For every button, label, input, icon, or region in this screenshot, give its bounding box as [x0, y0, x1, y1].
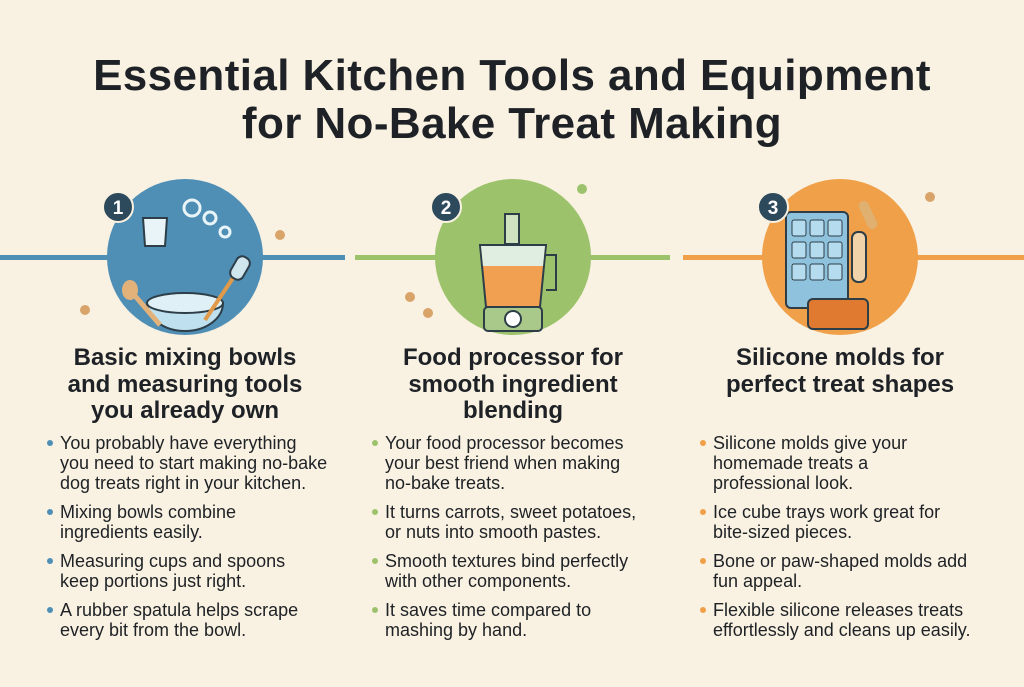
bullets 3: fun appeal.: [713, 571, 802, 591]
bullets 3: Flexible silicone releases treats: [713, 600, 963, 620]
bullets 1: Measuring cups and spoons: [60, 551, 285, 571]
bullets 1: Mixing bowls combine: [60, 502, 236, 522]
bullets 2: mashing by hand.: [385, 620, 527, 640]
bullets 2: It turns carrots, sweet potatoes,: [385, 502, 636, 522]
bullets 1: [47, 433, 327, 640]
icon: mixing tools circle: [107, 179, 263, 335]
bullets 2: Your food processor becomes: [385, 433, 623, 453]
bullets 2: or nuts into smooth pastes.: [385, 522, 601, 542]
heading 2: [403, 344, 623, 424]
heading 2: blending: [463, 397, 563, 424]
bullets 2: your best friend when making: [385, 453, 620, 473]
title: for No-Bake Treat Making: [242, 99, 782, 148]
bullets 3: homemade treats a: [713, 453, 868, 473]
bullets 3: [700, 433, 970, 640]
heading 3: perfect treat shapes: [726, 370, 954, 398]
bullets 1: every bit from the bowl.: [60, 620, 246, 640]
bullets 2: with other components.: [385, 571, 571, 591]
title: Essential Kitchen Tools and Equipment: [93, 51, 931, 100]
bullets 3: professional look.: [713, 473, 853, 493]
bullets 3: Silicone molds give your: [713, 433, 907, 453]
title: [93, 51, 931, 148]
badges: 3: [768, 198, 778, 219]
icon: food processor circle: [435, 179, 591, 335]
bullets 1: keep portions just right.: [60, 571, 246, 591]
heading 1: and measuring tools: [68, 370, 302, 398]
heading 3: [726, 344, 954, 398]
bullets 2: It saves time compared to: [385, 600, 591, 620]
bullets 1: you need to start making no-bake: [60, 453, 327, 473]
timeline line blue: [0, 255, 345, 260]
bullets 3: Ice cube trays work great for: [713, 502, 940, 522]
heading 3: Silicone molds for: [736, 344, 944, 371]
heading 2: Food processor for: [403, 344, 623, 371]
badges: 2: [441, 198, 451, 219]
badges: 1: [113, 198, 124, 219]
bullets 3: effortlessly and cleans up easily.: [713, 620, 970, 640]
heading 1: [68, 344, 302, 424]
timeline line green: [355, 255, 670, 260]
bullets 1: You probably have everything: [60, 433, 297, 453]
heading 1: you already own: [91, 397, 279, 424]
icon: silicone molds circle: [762, 179, 918, 335]
heading 1: Basic mixing bowls: [74, 344, 296, 371]
bullets 1: A rubber spatula helps scrape: [60, 600, 298, 620]
bullets 1: ingredients easily.: [60, 522, 203, 542]
bullets 3: bite-sized pieces.: [713, 522, 852, 542]
heading 2: smooth ingredient: [408, 370, 618, 398]
timeline line orange: [683, 255, 1024, 260]
badges: [103, 192, 788, 222]
decorative paws: [80, 184, 935, 318]
bullets 1: dog treats right in your kitchen.: [60, 473, 306, 493]
bullets 2: no-bake treats.: [385, 473, 505, 493]
bullets 2: [372, 433, 636, 640]
bullets 3: Bone or paw-shaped molds add: [713, 551, 967, 571]
bullets 2: Smooth textures bind perfectly: [385, 551, 628, 571]
